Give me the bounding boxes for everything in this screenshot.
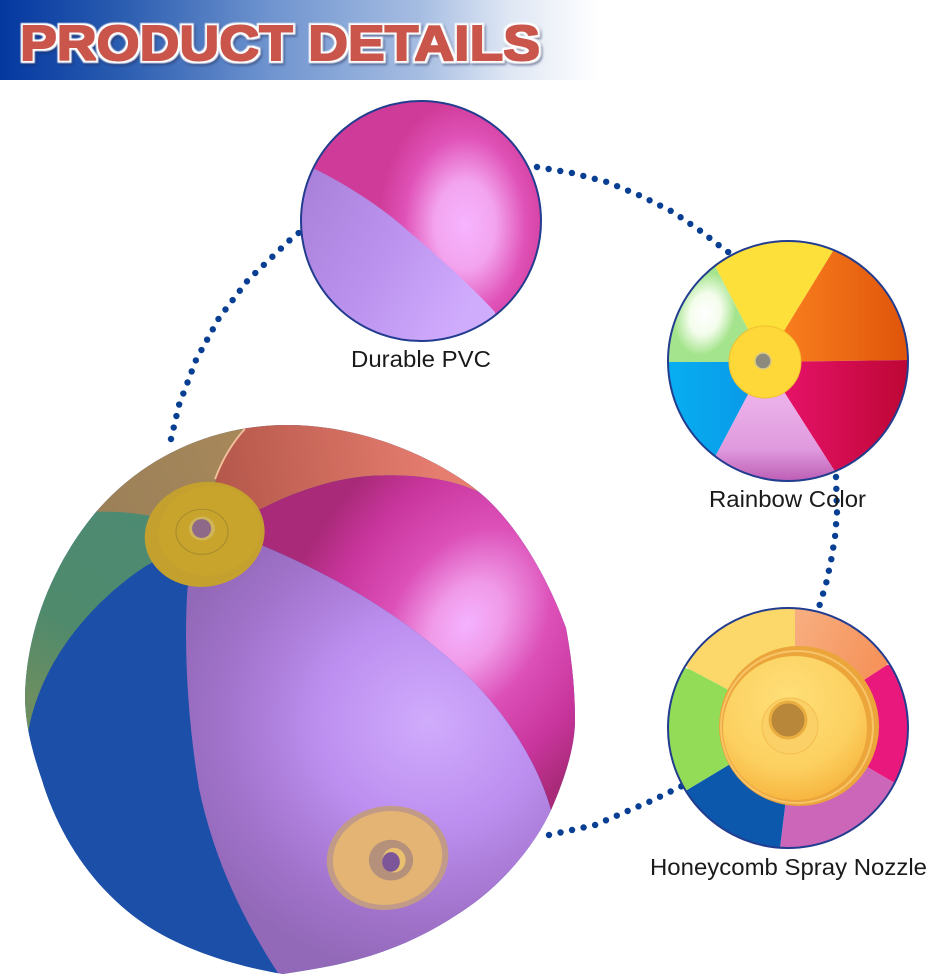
yellow [716, 242, 833, 331]
detail circle: durable PVC [295, 100, 542, 345]
panel: blue [28, 562, 278, 974]
panel: magenta [259, 475, 575, 810]
pink [716, 392, 834, 480]
label: honeycomb spray nozzle: Honeycomb Spray Nozzle [650, 854, 927, 880]
blue [686, 764, 786, 847]
green [669, 668, 729, 790]
nozzle [770, 702, 806, 738]
panel: coral [216, 425, 478, 510]
orange [784, 250, 907, 362]
crimson [784, 360, 907, 470]
panel: green [25, 512, 152, 730]
blue [669, 362, 748, 456]
peach [795, 609, 888, 680]
detail circle: spray nozzle [667, 607, 909, 849]
title: PRODUCT DETAILS [20, 17, 540, 71]
header banner [0, 0, 600, 80]
dotted connector ring [171, 167, 837, 835]
hub [719, 646, 879, 806]
label: durable PVC: Durable PVC [351, 346, 491, 372]
green [669, 266, 748, 362]
large beach ball [25, 425, 575, 974]
label: rainbow color: Rainbow Color [709, 486, 866, 512]
pink [864, 664, 907, 782]
panel: purple [186, 546, 551, 974]
panel: tan [96, 428, 246, 516]
detail circle: rainbow colors [667, 240, 909, 482]
yellow [686, 609, 795, 690]
hub [729, 326, 801, 398]
bottom valve disc [314, 793, 461, 923]
violet [780, 767, 894, 847]
top valve disc [130, 467, 279, 602]
